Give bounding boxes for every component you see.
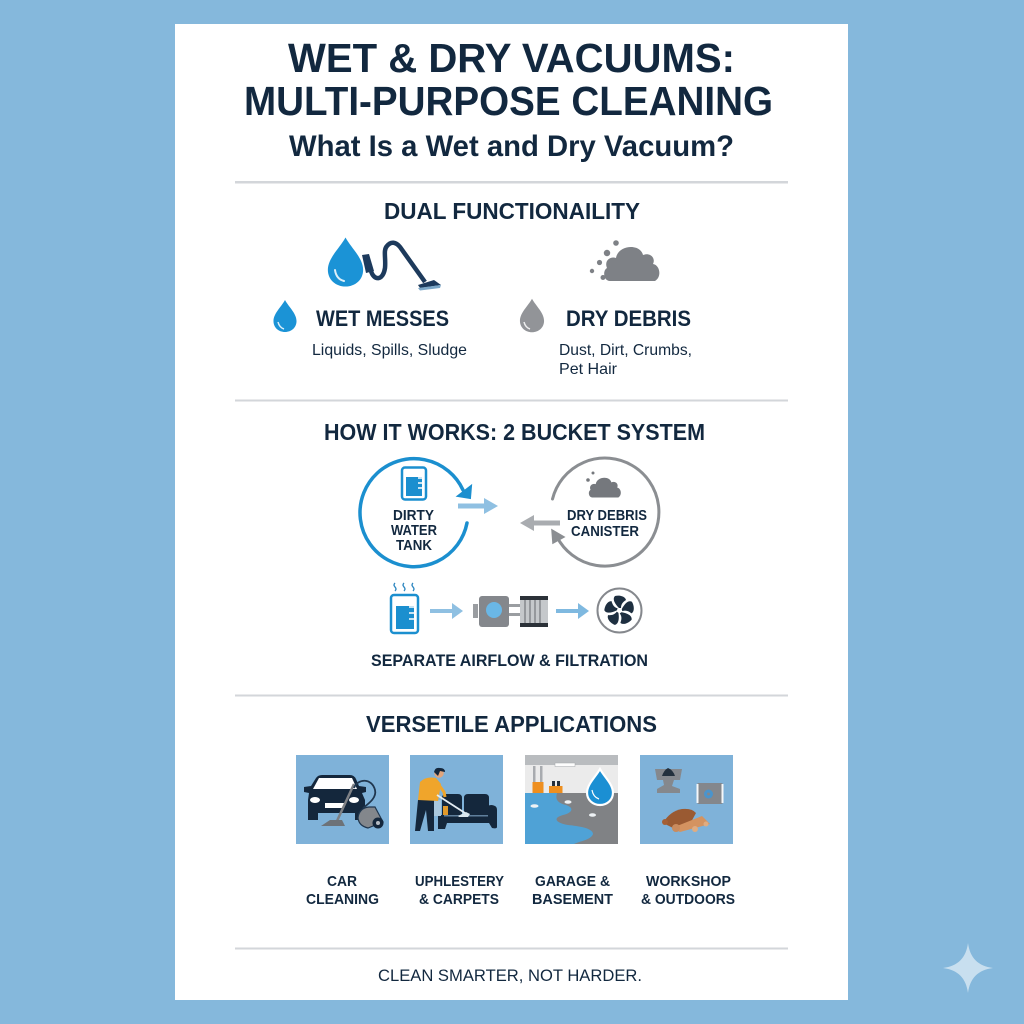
- label: dirty water tank: TANK: [396, 537, 432, 554]
- label: garage and basement: [532, 873, 613, 908]
- label: car cleaning: CAR: [327, 873, 357, 890]
- text: wet examples: Liquids, Spills, Sludge: [312, 342, 467, 359]
- label: garage and basement: GARAGE &: [535, 873, 610, 890]
- label: garage and basement: BASEMENT: [532, 891, 613, 908]
- label: dry debris canister: DRY DEBRIS: [567, 507, 647, 524]
- label: dirty water tank: DIRTY: [393, 507, 434, 524]
- arrow: filter to fan: [556, 603, 589, 619]
- label: dirty water tank: WATER: [391, 522, 437, 539]
- label: upholstery and carpets: [415, 873, 504, 908]
- label: dirty water tank: [391, 507, 437, 554]
- title: MULTI-PURPOSE CLEANING: [244, 78, 773, 124]
- panel: how it works: [324, 419, 705, 670]
- heading: applications: VERSETILE APPLICATIONS: [366, 711, 657, 737]
- arrow: tank to motor: [430, 603, 463, 619]
- panel: dual functionality: [273, 198, 692, 378]
- icon: small blue drop: [273, 300, 297, 332]
- icon: fan: [598, 588, 642, 632]
- label: dry debris canister: CANISTER: [571, 523, 639, 540]
- icon: dust cloud: [590, 240, 659, 281]
- title: WET & DRY VACUUMS:: [288, 35, 735, 81]
- heading: dual functionality: DUAL FUNCTIONAILITY: [384, 198, 640, 224]
- diagram: dry debris canister loop: [552, 458, 659, 566]
- diagram: dirty water tank loop: [360, 459, 471, 567]
- icon: small grey drop: [520, 299, 544, 332]
- arrow: to right: [458, 498, 498, 514]
- icon: filled tank with vapour: [391, 583, 418, 633]
- icon: sparkle: [943, 943, 993, 993]
- label: dry debris canister: [567, 507, 647, 540]
- label: car cleaning: CLEANING: [306, 891, 379, 908]
- label: upholstery and carpets: UPHLESTERY: [415, 873, 504, 890]
- label: workshop and outdoors: & OUTDOORS: [641, 891, 735, 908]
- arrow: to left: [520, 515, 560, 531]
- white card: [175, 24, 848, 1000]
- title: [244, 35, 773, 124]
- label: car cleaning: [306, 873, 379, 908]
- label: workshop and outdoors: [641, 873, 735, 908]
- icon: small cloud: [586, 472, 621, 497]
- label: wet messes: WET MESSES: [316, 306, 449, 331]
- caption: airflow: SEPARATE AIRFLOW & FILTRATION: [371, 651, 648, 670]
- text: dry examples: Pet Hair: [559, 361, 618, 378]
- subtitle: What Is a Wet and Dry Vacuum?: [289, 130, 734, 163]
- text: dry examples: [559, 342, 692, 378]
- image: car cleaning: [296, 755, 389, 844]
- image: workshop and outdoors: [640, 755, 733, 844]
- icon: motor and filter: [473, 596, 548, 627]
- panel: applications: [296, 711, 735, 908]
- heading: how it works: HOW IT WORKS: 2 BUCKET SYSTEM: [324, 419, 705, 445]
- icon: water drop with vacuum: [328, 238, 441, 290]
- icon: tank: [402, 468, 426, 500]
- label: workshop and outdoors: WORKSHOP: [646, 873, 731, 890]
- text: dry examples: Dust, Dirt, Crumbs,: [559, 342, 692, 359]
- image: upholstery cleaning: [410, 755, 503, 844]
- footer tagline: CLEAN SMARTER, NOT HARDER.: [378, 966, 642, 985]
- label: upholstery and carpets: & CARPETS: [419, 891, 499, 908]
- label: dry debris: DRY DEBRIS: [566, 306, 691, 331]
- image: garage and basement: [525, 755, 618, 844]
